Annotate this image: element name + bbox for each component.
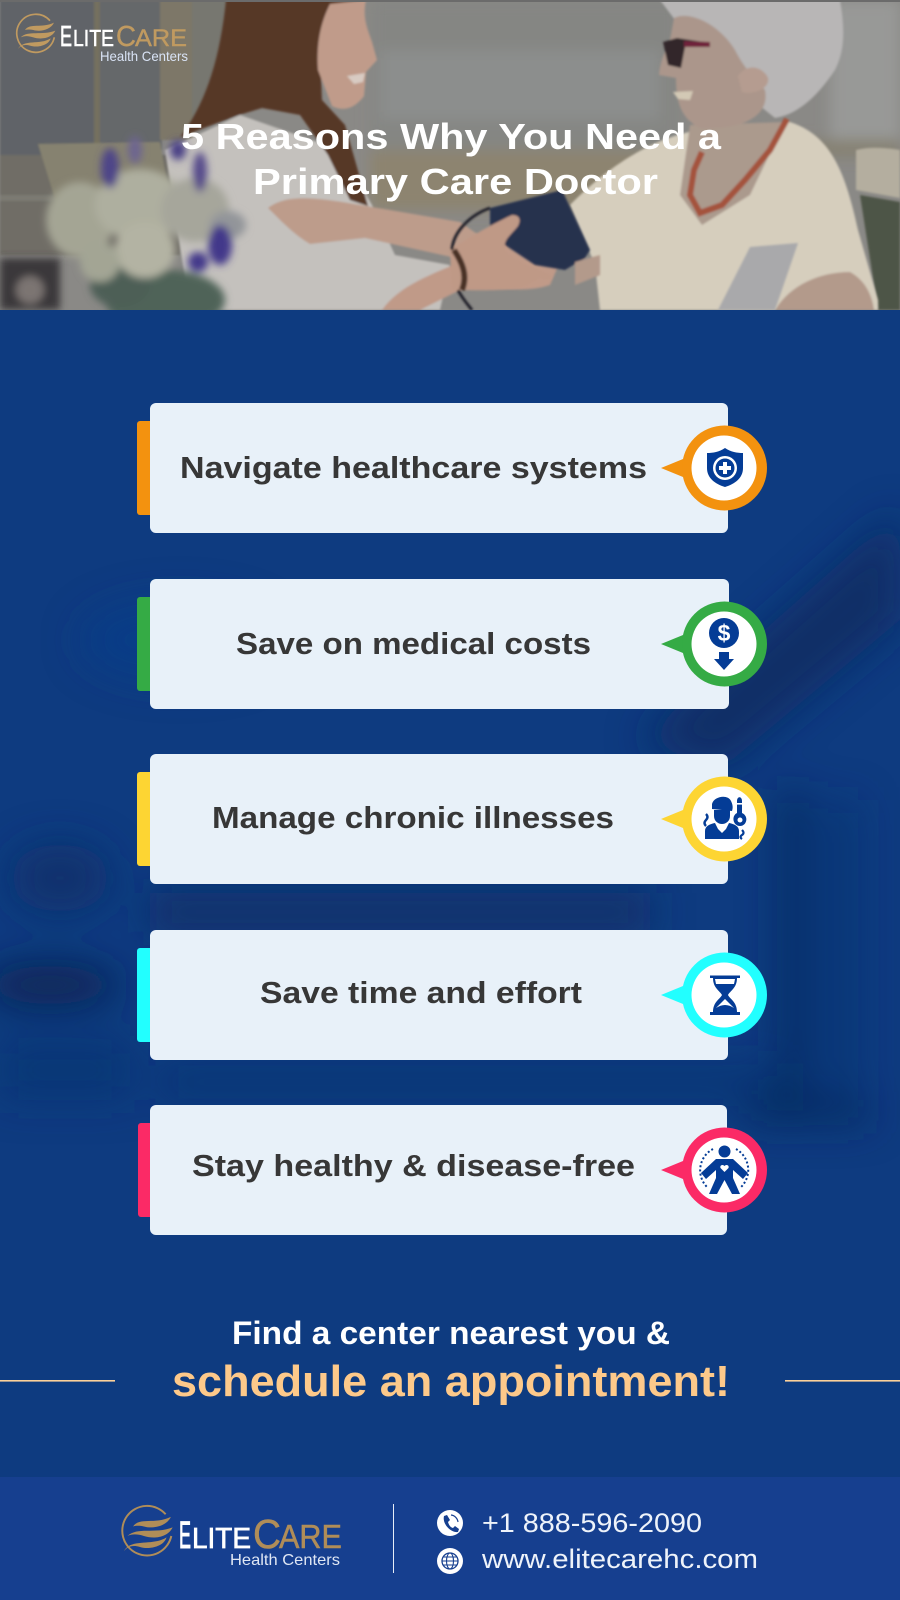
card 4: save time and effort xyxy=(137,930,767,1060)
left wall xyxy=(0,0,228,255)
icon: human body with heart xyxy=(661,1128,767,1212)
card 1: navigate healthcare systems: Navigate healthcare systems xyxy=(180,450,647,485)
website: www.elitecarehc.com xyxy=(481,1544,758,1574)
card 3: manage chronic illnesses: Manage chronic illnesses xyxy=(212,800,614,835)
footer logo: LITE xyxy=(192,1523,251,1555)
header photo: doctor and patient xyxy=(0,0,900,330)
icon: shield with medical cross xyxy=(661,426,767,510)
card 2: save on medical costs xyxy=(137,579,767,709)
footer logo: Health Centers xyxy=(230,1552,340,1569)
tablet xyxy=(718,243,798,310)
card 1: navigate healthcare systems xyxy=(137,403,767,533)
header logo: ARE xyxy=(135,25,187,52)
card 4: save time and effort: Save time and effort xyxy=(260,975,582,1010)
header logo: Health Centers xyxy=(100,48,188,64)
card 3: manage chronic illnesses xyxy=(137,754,767,884)
header logo: C xyxy=(116,21,136,53)
doctor: coat, hair, face, arm xyxy=(165,0,560,310)
icon: dollar with down arrow xyxy=(661,602,767,686)
card 5: stay healthy and disease-free xyxy=(138,1105,767,1235)
header logo: E xyxy=(60,21,72,53)
footer logo: E xyxy=(179,1515,191,1557)
footer bar xyxy=(0,1477,900,1600)
header logo xyxy=(17,14,188,64)
right background window xyxy=(370,0,900,210)
main blue blurred background xyxy=(0,524,900,1136)
footer logo: ARE xyxy=(279,1518,342,1555)
blood pressure cuff xyxy=(450,190,600,310)
icon: phone xyxy=(437,1510,463,1536)
title xyxy=(181,116,722,202)
icon: dollar with down arrow: $ xyxy=(718,620,731,646)
flowers xyxy=(46,136,246,330)
title: Primary Care Doctor xyxy=(253,161,658,202)
call to action: schedule an appointment! xyxy=(172,1357,730,1406)
footer logo xyxy=(122,1506,342,1569)
patient: sweater, hair, face, necklace, arm xyxy=(570,0,878,310)
phone number: +1 888-596-2090 xyxy=(482,1508,702,1538)
icon: hourglass xyxy=(661,952,767,1038)
call to action xyxy=(0,1315,900,1406)
call to action: Find a center nearest you & xyxy=(232,1315,670,1351)
icon: patient with thermometer xyxy=(661,776,767,862)
header logo: LITE xyxy=(73,25,114,51)
footer logo: C xyxy=(253,1511,281,1557)
card 2: save on medical costs: Save on medical costs xyxy=(236,626,591,661)
card 5: stay healthy and disease-free: Stay healthy & disease-free xyxy=(192,1148,635,1183)
title: 5 Reasons Why You Need a xyxy=(181,116,722,157)
icon: globe xyxy=(437,1548,463,1574)
